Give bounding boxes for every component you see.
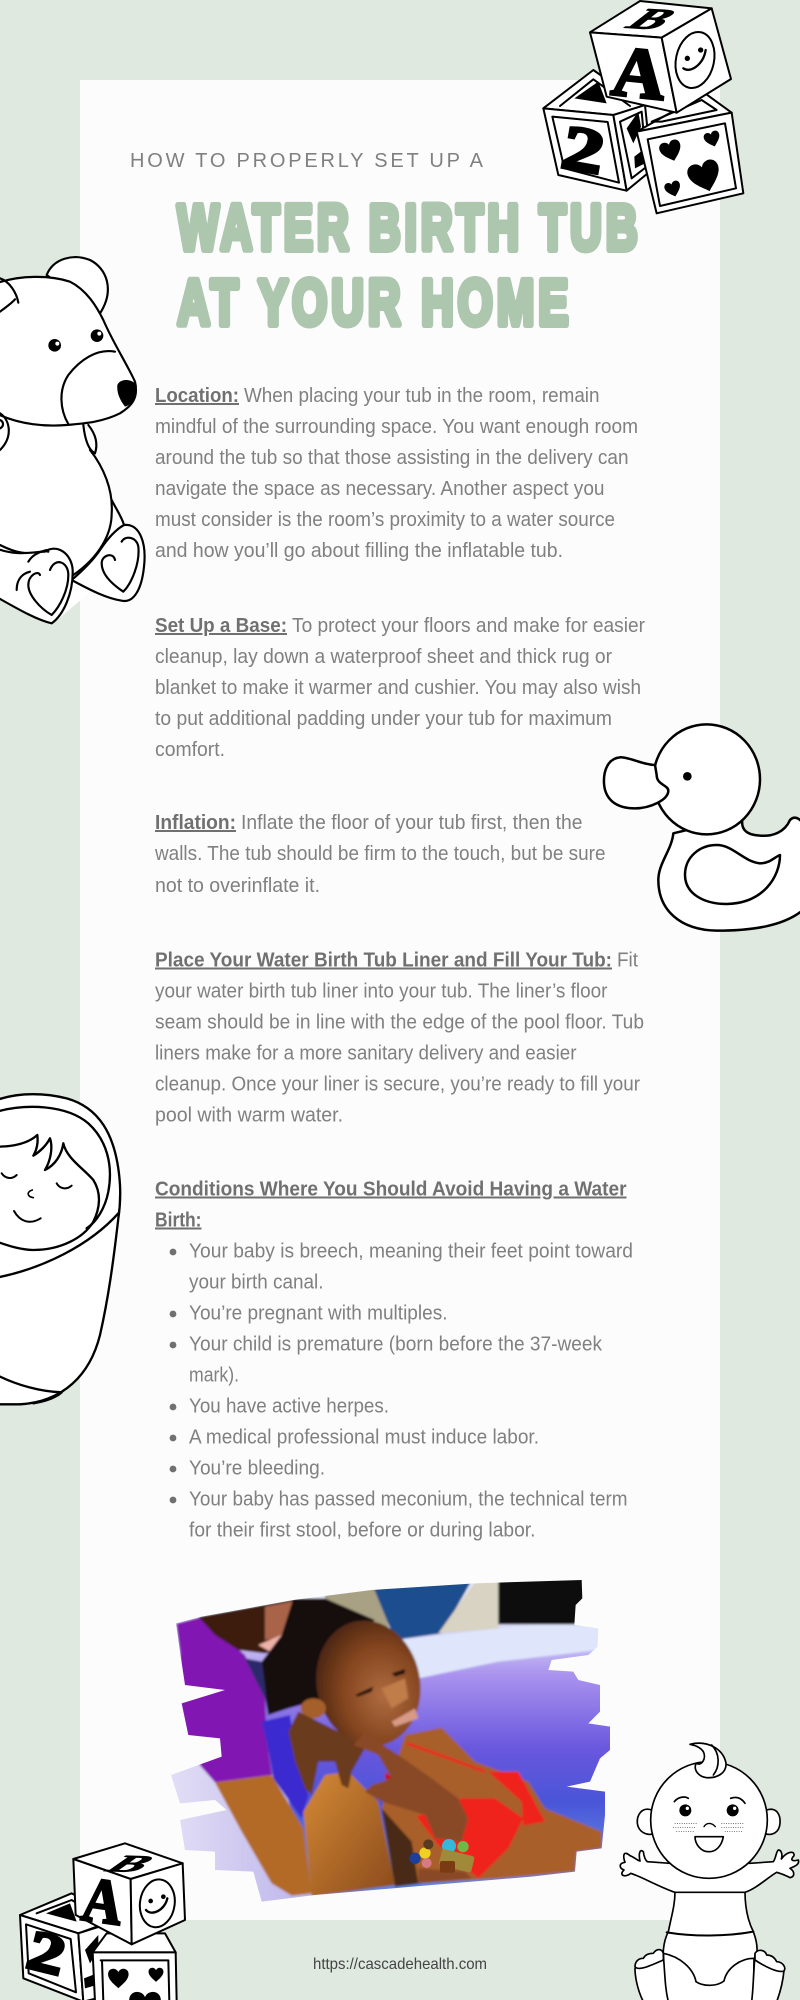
text block: liner <box>155 950 644 1126</box>
text block: liner: Place Your Water Birth Tub Liner and Fill Your Tub: <box>155 950 612 972</box>
text block: location: must consider is the room’s proximity to a water source <box>155 509 615 531</box>
text block: location: mindful of the surrounding space. You want enough room <box>155 416 638 438</box>
upper block: letters and smiley: B <box>96 1850 167 1877</box>
text block: set up a base: comfort. <box>155 739 225 761</box>
lower right block: hearts <box>93 1933 177 2000</box>
text block: inflation <box>154 812 606 897</box>
text block: liner: pool with warm water. <box>155 1104 343 1126</box>
bullet list: conditions: for their first stool, before or during labor. <box>189 1520 536 1542</box>
photo: couple in birth tub with brush-stroke mask <box>165 1575 620 1908</box>
icon: swaddled baby <box>0 1094 120 1404</box>
text block: location: around the tub so that those assisting in the delivery can <box>155 447 628 469</box>
text block: liner: liners make for a more sanitary delivery and easier <box>155 1042 577 1064</box>
bullet list: conditions: Your child is premature (born before the 37-week <box>189 1334 603 1356</box>
bullet list: conditions: A medical professional must induce labor. <box>189 1426 539 1448</box>
upper block: letters and smiley: B <box>615 3 689 36</box>
lower right block: hearts <box>637 93 743 213</box>
bullet list: conditions: You’re bleeding. <box>189 1458 325 1480</box>
text block: location: navigate the space as necessary. Another aspect you <box>155 478 604 500</box>
icon: rubber duck <box>604 724 800 931</box>
text block: set up a base: To protect your floors and make for easier <box>292 615 645 637</box>
text block: liner: cleanup. Once your liner is secure, you’re ready to fill your <box>155 1074 640 1096</box>
text block: set up a base: blanket to make it warmer and cushier. You may also wish <box>155 677 641 699</box>
text block: location: Location: <box>155 385 239 407</box>
text block: location <box>155 385 638 562</box>
text block: conditions heading: Conditions Where You Should Avoid Having a Water <box>155 1178 627 1200</box>
title <box>178 192 642 338</box>
bullet list: conditions: Your baby has passed meconium, the technical term <box>189 1488 628 1510</box>
bullet list: conditions: Your baby is breech, meaning their feet point toward <box>189 1240 633 1262</box>
lower left block <box>20 1893 120 2000</box>
text block: inflation: walls. The tub should be firm to the touch, but be sure <box>154 843 606 865</box>
lower left block: 2 <box>21 1919 72 1988</box>
lower left block <box>543 70 652 191</box>
footer url: https://cascadehealth.com <box>313 1956 487 1973</box>
upper block: letters and smiley: A <box>78 1864 128 1939</box>
icon: sitting baby <box>620 1743 799 2000</box>
panel: white content card <box>80 80 720 1920</box>
text block: conditions heading: Birth: <box>155 1210 202 1232</box>
text block: inflation: Inflate the floor of your tub first, then the <box>241 812 582 834</box>
text block: inflation: not to overinflate it. <box>155 875 320 897</box>
upper block: letters and smiley: A <box>608 31 670 116</box>
icon: toy blocks, top right <box>543 1 743 213</box>
upper block: letters and smiley <box>590 1 731 116</box>
text block: liner: your water birth tub liner into your tub. The liner’s floor <box>155 980 608 1002</box>
lower left block: 2 <box>557 112 610 188</box>
bullet list: conditions: You have active herpes. <box>189 1396 389 1418</box>
bullet list: conditions <box>170 1240 633 1542</box>
text block: set up a base: to put additional padding under your tub for maximum <box>155 708 612 730</box>
bullet list: conditions: mark). <box>189 1364 239 1386</box>
text block: conditions heading <box>155 1178 627 1232</box>
text block: location: When placing your tub in the room, remain <box>244 385 600 407</box>
bullet list: conditions: your birth canal. <box>189 1272 324 1294</box>
title: AT YOUR HOME <box>178 266 572 338</box>
text block: set up a base: Set Up a Base: <box>155 615 287 637</box>
text block: liner: Fit <box>617 950 638 972</box>
bullet list: conditions: You’re pregnant with multiples. <box>189 1302 448 1324</box>
icon: teddy bear <box>0 257 145 623</box>
text block: inflation: Inflation: <box>155 812 236 834</box>
icon: toy blocks, bottom left <box>20 1843 185 2000</box>
text block: liner: seam should be in line with the edge of the pool floor. Tub <box>155 1012 644 1034</box>
text block: set up a base <box>155 615 645 761</box>
upper block: letters and smiley <box>73 1843 185 1944</box>
text block: location: and how you’ll go about filling the inflatable tub. <box>155 540 563 562</box>
text block: set up a base: cleanup, lay down a waterproof sheet and thick rug or <box>155 646 612 668</box>
bracelet beads <box>409 1839 475 1873</box>
subtitle: HOW TO PROPERLY SET UP A <box>130 150 484 172</box>
